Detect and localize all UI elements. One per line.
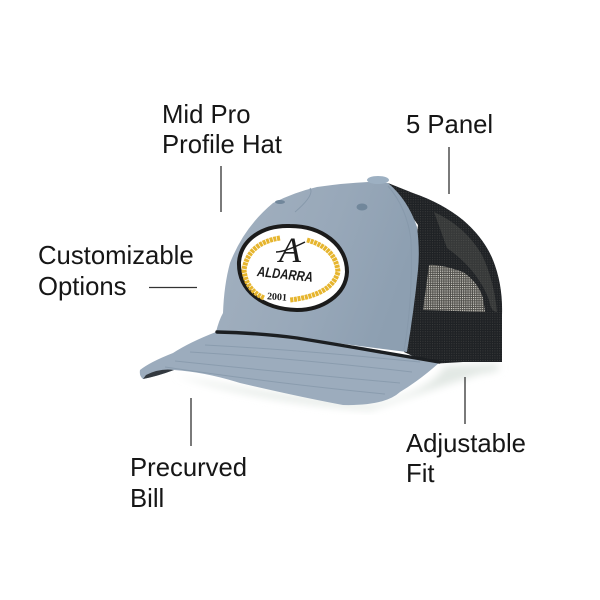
bill — [140, 332, 440, 405]
label: Precurved Bill: Bill — [130, 485, 164, 513]
leader: Precurved — [190, 398, 192, 446]
hat photo — [140, 176, 502, 410]
label: Mid Pro Profile Hat: Profile Hat — [162, 131, 282, 159]
label: 5 Panel: 5 Panel — [406, 111, 493, 139]
label: Precurved Bill — [130, 454, 247, 513]
rope — [217, 332, 439, 362]
hat shadow — [175, 364, 500, 410]
patch — [239, 226, 347, 310]
leader: Mid Pro — [220, 166, 222, 212]
logo A: A — [277, 230, 302, 270]
mesh highlight — [434, 212, 497, 312]
leader: Customizable — [149, 286, 197, 288]
mesh side opening — [423, 265, 485, 312]
eyelets — [356, 204, 368, 210]
label: Customizable Options — [38, 242, 194, 301]
logo swash — [276, 242, 305, 252]
leader: 5 Panel — [448, 147, 450, 194]
mesh back panels — [388, 183, 502, 364]
bill underside — [143, 370, 174, 379]
label: Adjustable Fit: Fit — [406, 460, 435, 488]
bill stitching — [165, 345, 420, 394]
crown front panel — [216, 182, 419, 352]
button — [367, 176, 389, 184]
label: Customizable Options: Customizable — [38, 242, 194, 270]
leader: Adjustable — [464, 377, 466, 424]
logo year: 2001 — [267, 291, 287, 304]
label: Adjustable Fit: Adjustable — [406, 430, 526, 458]
label: Mid Pro Profile Hat: Mid Pro — [162, 101, 251, 129]
logo name: ALDARRA — [256, 263, 314, 285]
label: Adjustable Fit — [406, 430, 526, 488]
patch border — [239, 226, 347, 310]
label: Mid Pro Profile Hat — [162, 101, 282, 159]
label: Precurved Bill: Precurved — [130, 454, 247, 482]
crown seam — [295, 186, 411, 350]
wreath — [244, 238, 338, 300]
label: Customizable Options: Options — [38, 273, 127, 301]
